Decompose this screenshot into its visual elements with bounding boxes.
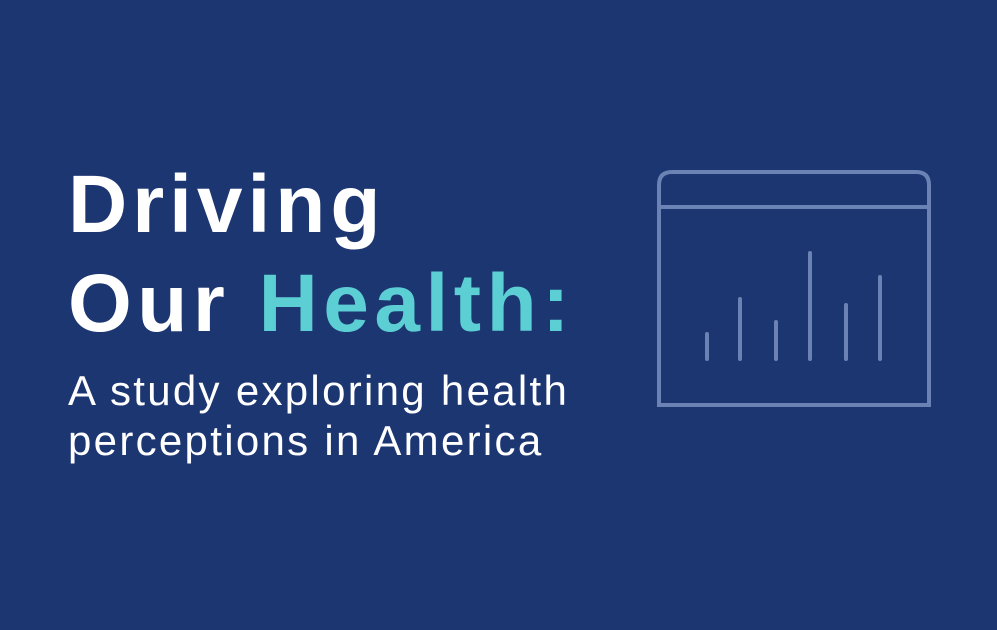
title line 2: Our Health: xyxy=(68,258,575,349)
subtitle: perceptions in America xyxy=(68,417,543,464)
subtitle xyxy=(68,367,569,464)
title line 1: Driving xyxy=(68,159,385,250)
subtitle: A study exploring health xyxy=(68,367,569,414)
